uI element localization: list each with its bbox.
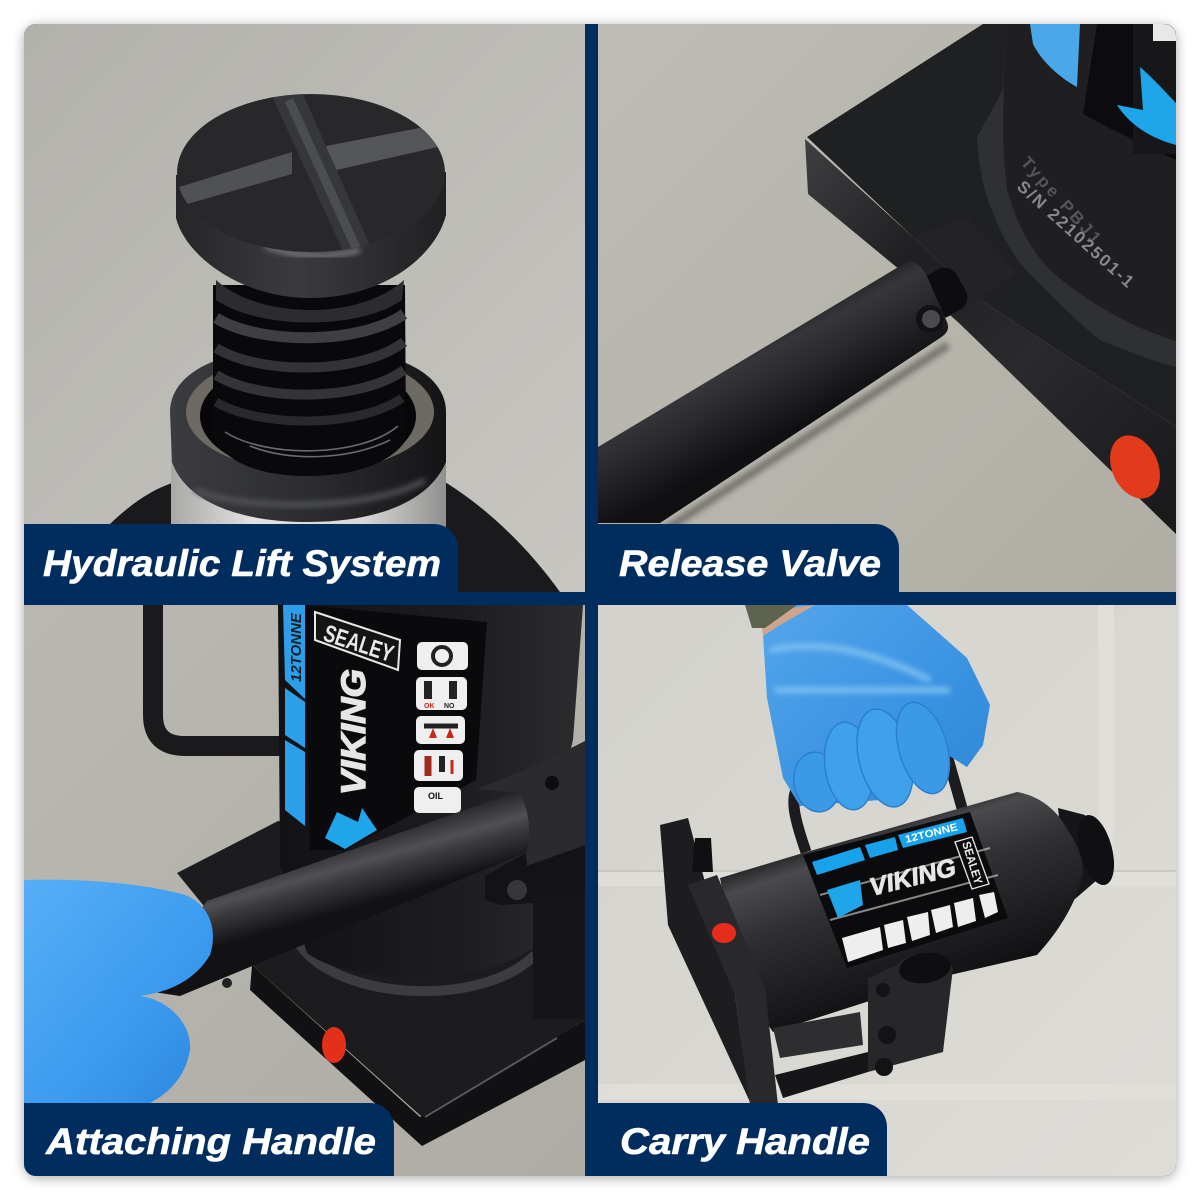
lower clamp (485, 820, 585, 905)
pictogram stack: OK (424, 703, 434, 710)
black label region (1083, 24, 1176, 160)
sticker reflections (820, 848, 998, 920)
jack base plate top (807, 24, 1176, 427)
red reflector (712, 923, 736, 943)
plate gusset (913, 237, 981, 300)
finger 4 (887, 696, 959, 800)
finger 3 (848, 703, 922, 813)
plate side edge (805, 139, 1176, 534)
label text: Release Valve (619, 543, 881, 584)
saddle cap top (177, 94, 445, 252)
label tab (24, 524, 458, 592)
jack body base (110, 482, 560, 592)
handle socket (868, 950, 953, 1076)
jack neck (1058, 808, 1097, 905)
cap highlight (265, 246, 360, 256)
saddle cap side (176, 172, 446, 298)
jack body (720, 792, 1083, 1032)
finger 2 (819, 719, 879, 813)
label text: Attaching Handle (45, 1121, 376, 1162)
chrome cylinder (171, 440, 446, 530)
Viking logo text: VIKING (335, 669, 373, 795)
blue model sticker (285, 688, 305, 748)
pictogram row (842, 892, 998, 962)
type text: Type PBJ1 (1017, 153, 1105, 247)
handle tube (140, 791, 529, 996)
block wall (598, 605, 1176, 1176)
blue glove hand (24, 880, 213, 1103)
threaded screw (213, 280, 406, 476)
label tab (598, 1103, 887, 1176)
panel: release valve (598, 24, 1176, 592)
small pin (222, 978, 232, 988)
sticker (305, 605, 487, 850)
collar (170, 347, 446, 522)
label highlight strip (1133, 24, 1176, 154)
concrete floor (598, 24, 1176, 592)
handle tube (598, 262, 948, 523)
wall mortar lines (598, 605, 1176, 1092)
bolt (507, 880, 527, 900)
white tag (1153, 24, 1176, 41)
pump rod (773, 1012, 863, 1058)
base plate face (660, 818, 750, 1102)
finger 1 (789, 748, 845, 816)
Sealey badge: SEALEY (320, 620, 397, 668)
collar opening (200, 388, 416, 456)
base plate edge (688, 875, 778, 1105)
collar inner rim (186, 374, 434, 462)
Sealey badge (315, 612, 400, 670)
12 tonne text: 12TONNE (904, 821, 959, 846)
ram pillar (533, 894, 585, 1019)
pictogram stack (414, 642, 468, 813)
panel: hydraulic lift system (24, 24, 585, 592)
wall joint shade (598, 870, 1176, 872)
12 tonne text: 12TONNE (288, 612, 305, 682)
label text: Hydraulic Lift System (43, 543, 441, 584)
weld ring (297, 940, 535, 991)
jack body (278, 605, 583, 978)
blue label (1030, 24, 1080, 87)
blue badges (812, 818, 967, 875)
top knob (692, 838, 713, 872)
concrete floor (24, 605, 585, 1176)
handle bracket (794, 748, 962, 852)
cross grooves (179, 94, 438, 250)
jack top cap (1071, 811, 1121, 889)
carry handle wire (153, 605, 280, 746)
Sealey badge: SEALEY (959, 840, 985, 886)
label tab (24, 1103, 394, 1176)
bolt (916, 305, 944, 333)
label tab (598, 524, 899, 592)
pictogram stack: NO (444, 703, 455, 710)
viking ship logo (1117, 67, 1176, 145)
collar highlight (195, 480, 425, 505)
red reflector (322, 1027, 346, 1063)
viking ship logo (827, 880, 863, 918)
plate front highlight (425, 1038, 557, 1117)
tube shadow (665, 345, 948, 530)
label text: Carry Handle (620, 1121, 870, 1162)
jack base plate (177, 821, 585, 1117)
blue capacity stripe (283, 605, 305, 699)
jack body (977, 24, 1176, 367)
serial number: S/N 22102501-1 (1013, 177, 1138, 291)
panel: attaching handle (24, 605, 585, 1176)
wrist skin (760, 605, 815, 636)
sticker band (803, 812, 1008, 968)
handle socket clamp (477, 741, 585, 866)
pictogram stack: OIL (428, 791, 444, 801)
plate side edge (250, 965, 585, 1146)
clamp pin (545, 776, 559, 790)
blue glove hand (763, 605, 990, 816)
panel: carry handle (598, 605, 1176, 1176)
viking ship logo (325, 808, 377, 849)
glove folds (770, 646, 950, 690)
floor background (24, 24, 585, 592)
valve stem (927, 268, 968, 318)
Viking logo text: VIKING (867, 853, 959, 902)
watch strap (745, 605, 797, 628)
red reflector (1110, 435, 1160, 499)
blue address sticker (285, 740, 305, 826)
pump link (775, 1052, 868, 1098)
